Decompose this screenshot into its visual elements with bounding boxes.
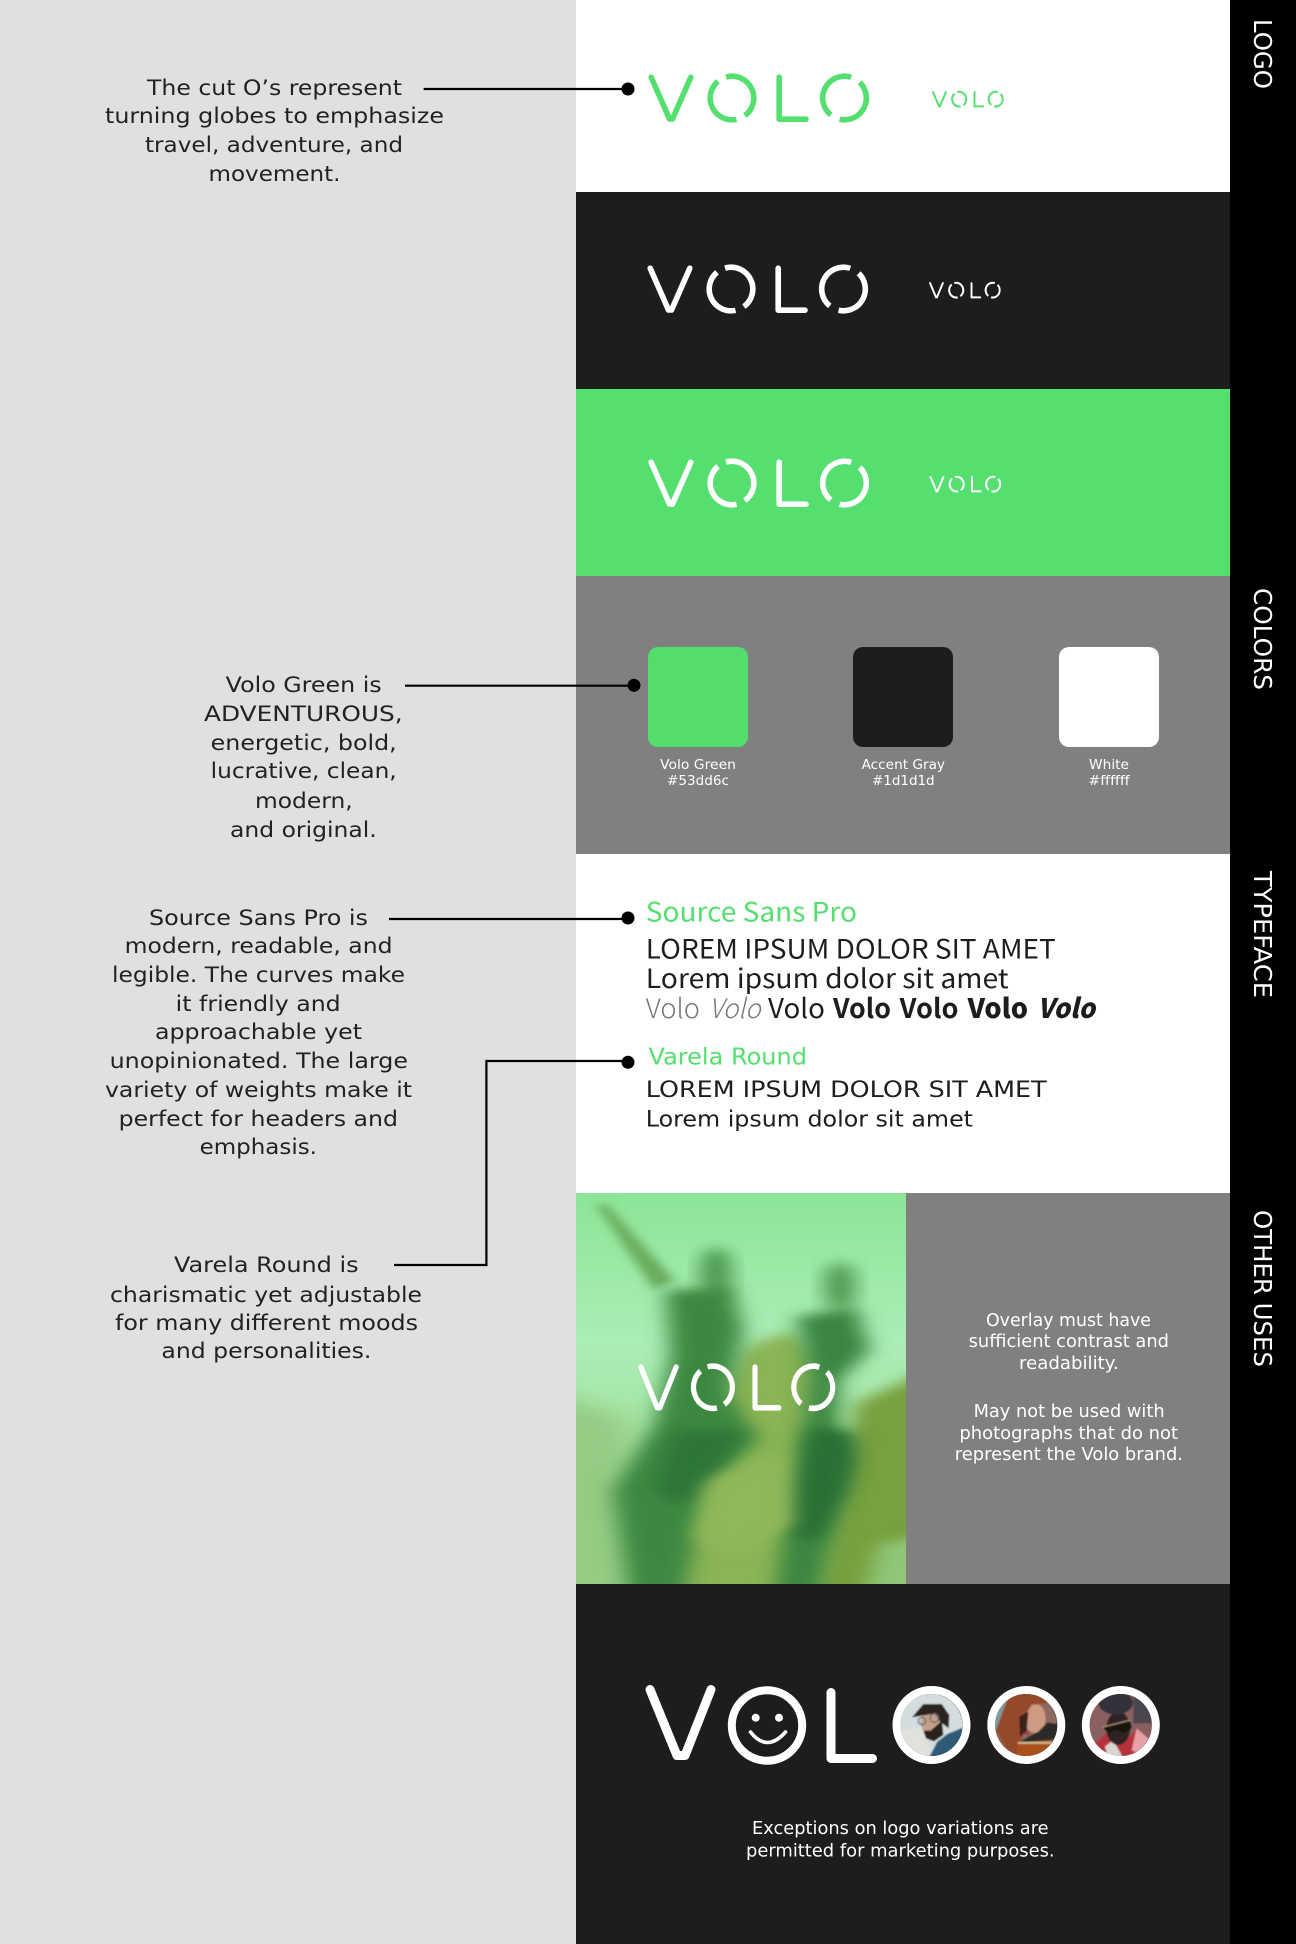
text block: overlay rules: sufficient contrast and [969, 1332, 1169, 1352]
logo: marketing variation letters V and L [650, 1690, 872, 1758]
text block: overlay rules [955, 1311, 1183, 1465]
panel: logo variations [576, 1584, 1230, 1944]
connector: volo green to swatch [405, 679, 640, 692]
type specimen: source sans pro: Volo [832, 987, 891, 1026]
callout text: volo green: ADVENTUROUS, [204, 702, 403, 726]
text block: logo variations note [746, 1818, 1055, 1862]
callout text: cut O's: movement. [208, 162, 340, 186]
type specimen: source sans pro: Volo [967, 987, 1028, 1026]
swatch: volo green: #53dd6c [667, 773, 729, 789]
type specimen: varela round: Lorem ipsum dolor sit amet [646, 1108, 973, 1132]
callout text: source sans pro: unopinionated. The large [110, 1049, 408, 1073]
callout text: varela round: for many different moods [115, 1311, 418, 1335]
type specimen: varela round: Varela Round [648, 1044, 807, 1070]
logo: small white on dark [930, 283, 1000, 298]
label: other uses: OTHER USES [1248, 1210, 1277, 1367]
logo: small green on white [933, 92, 1003, 107]
panel: overlay rules [906, 1193, 1230, 1584]
callout text: source sans pro [105, 906, 412, 1159]
panel: left gray background [0, 0, 576, 1944]
swatch: accent gray [853, 647, 953, 789]
panel: logo on dark [576, 192, 1230, 389]
callout text: varela round: Varela Round is [174, 1253, 359, 1277]
left lower haze [576, 1393, 637, 1584]
callout text: source sans pro: legible. The curves make [112, 963, 405, 987]
callout text: varela round: charismatic yet adjustable [110, 1283, 422, 1307]
text block: overlay rules: May not be used with [974, 1402, 1165, 1422]
rider two [824, 1262, 856, 1312]
type specimen: source sans pro: Volo [768, 987, 825, 1026]
swatch: white: White [1089, 757, 1129, 773]
sidebar: section labels [1230, 0, 1296, 1944]
panel: logo on white [576, 0, 1230, 192]
label: typeface: TYPEFACE [1248, 870, 1277, 998]
callout text: source sans pro: emphasis. [200, 1135, 317, 1159]
logo: large green on white [651, 76, 866, 120]
type specimen: source sans pro [646, 890, 1098, 1026]
callout text: source sans pro: variety of weights make it [105, 1078, 412, 1102]
swatch: white: #ffffff [1088, 773, 1130, 789]
callout text: source sans pro: perfect for headers and [119, 1107, 398, 1131]
panel: typeface [576, 854, 1230, 1193]
type specimen: source sans pro: Volo [709, 987, 762, 1026]
text block: overlay rules: readability. [1019, 1354, 1119, 1374]
icon: portrait of man with sunglasses [1086, 1690, 1157, 1760]
callout text: source sans pro: approachable yet [155, 1020, 362, 1044]
callout text: varela round [110, 1253, 422, 1363]
icon: portrait of red-haired woman [991, 1690, 1062, 1760]
text block: overlay rules: represent the Volo brand. [955, 1445, 1183, 1465]
label: colors: COLORS [1248, 588, 1277, 690]
swatch: accent gray: Accent Gray [862, 757, 945, 773]
type specimen: source sans pro: Lorem ipsum dolor sit amet [646, 957, 1008, 996]
type specimen: varela round: LOREM IPSUM DOLOR SIT AMET [646, 1078, 1047, 1103]
callout text: cut O's: turning globes to emphasize [105, 104, 444, 128]
connector: source sans to specimen [389, 912, 634, 924]
callout text: cut O's: The cut O’s represent [146, 76, 402, 100]
panel: logo on green [576, 389, 1230, 576]
type specimen: source sans pro: Volo [899, 987, 958, 1026]
callout text: volo green: lucrative, clean, [211, 759, 397, 783]
type specimen: source sans pro: LOREM IPSUM DOLOR SIT AMET [646, 928, 1056, 966]
callout text: volo green: Volo Green is [226, 673, 382, 697]
logo: small white on green [931, 477, 1000, 492]
icon: smiley face O [732, 1690, 802, 1761]
connector: varela round to specimen [394, 1056, 634, 1265]
photo: blurred riders with green overlay [576, 1193, 906, 1584]
callout text: volo green: modern, [255, 789, 353, 813]
type specimen: source sans pro: Volo [646, 987, 700, 1026]
text block: overlay rules: photographs that do not [959, 1424, 1178, 1444]
swatch: accent gray: #1d1d1d [872, 773, 935, 789]
rider one [700, 1247, 732, 1300]
label: logo: LOGO [1248, 19, 1277, 89]
lighter horse chest [695, 1453, 792, 1557]
swatch: volo green: Volo Green [660, 757, 736, 773]
callout text: volo green: and original. [230, 818, 377, 842]
connector: cut O's to logo [424, 82, 634, 96]
right horse [820, 1370, 906, 1584]
callout text: volo green: energetic, bold, [211, 731, 397, 755]
type specimen: source sans pro: Volo [1037, 987, 1098, 1026]
type specimen: varela round [646, 1044, 1047, 1132]
logo: large white on green [651, 461, 866, 505]
callout text: volo green [204, 673, 403, 842]
callout text: cut O's: travel, adventure, and [145, 133, 403, 157]
arm [597, 1203, 675, 1290]
type specimen: source sans pro: Source Sans Pro [646, 890, 857, 930]
callout text: source sans pro: modern, readable, and [125, 934, 392, 958]
text block: logo variations note: Exceptions on logo variations are [752, 1818, 1049, 1839]
callout text: cut O's [105, 76, 444, 186]
icon: portrait of bearded man [896, 1690, 967, 1760]
horse neck and body [676, 1326, 836, 1584]
text block: overlay rules: Overlay must have [986, 1311, 1151, 1331]
callout text: source sans pro: it friendly and [176, 992, 341, 1016]
logo: white over photo [641, 1366, 833, 1408]
callout text: varela round: and personalities. [161, 1339, 371, 1363]
text block: logo variations note: permitted for marketing purposes. [746, 1841, 1055, 1862]
logo: large white on dark [650, 267, 865, 311]
swatch: volo green [648, 647, 748, 789]
panel: colors [576, 576, 1230, 854]
callout text: source sans pro: Source Sans Pro is [149, 906, 368, 930]
swatch: white [1059, 647, 1159, 789]
